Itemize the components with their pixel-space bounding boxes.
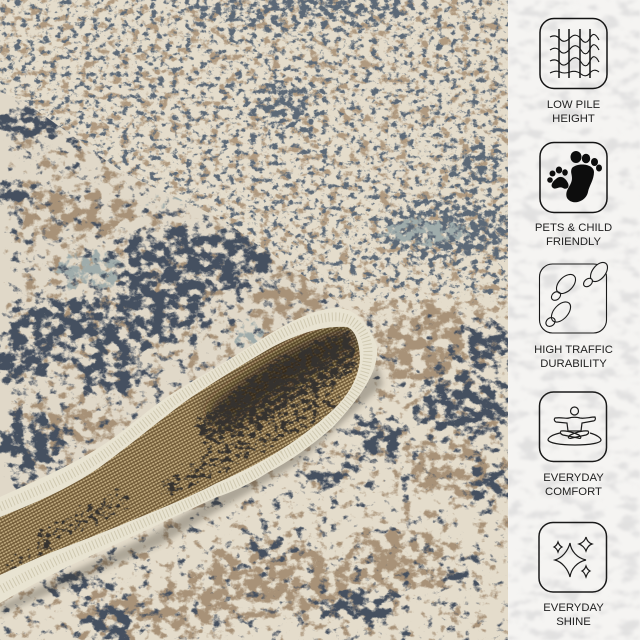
label: pets and child friendly: PETS & CHILD: [535, 222, 612, 234]
feature: everyday comfort: [540, 392, 606, 498]
label: everyday comfort: COMFORT: [545, 486, 602, 498]
feature: low pile height: [540, 18, 607, 125]
rolled rug front: [0, 92, 342, 496]
panel: side features background: [508, 0, 640, 640]
label: everyday comfort: EVERYDAY: [543, 472, 604, 484]
shadow under rolled rug: [0, 365, 383, 615]
label: low pile height: LOW PILE: [547, 99, 600, 111]
icon: sparkles: [539, 522, 606, 592]
label: everyday shine: SHINE: [556, 616, 591, 628]
feature: high traffic durability: [534, 259, 613, 370]
rug binding edge: [0, 308, 377, 603]
icon: footprints: [540, 259, 611, 333]
feature: pets and child friendly: [535, 142, 612, 248]
icon: paw and foot: [540, 142, 607, 212]
label: everyday shine: EVERYDAY: [543, 602, 604, 614]
icon: pile fibres: [540, 18, 607, 88]
rug backing: [0, 320, 370, 580]
icon: meditating figure: [540, 392, 606, 462]
feature: everyday shine: [539, 522, 606, 628]
label: low pile height: HEIGHT: [552, 113, 595, 125]
label: high traffic durability: HIGH TRAFFIC: [534, 344, 613, 356]
label: pets and child friendly: FRIENDLY: [546, 236, 601, 248]
label: high traffic durability: DURABILITY: [540, 358, 607, 370]
